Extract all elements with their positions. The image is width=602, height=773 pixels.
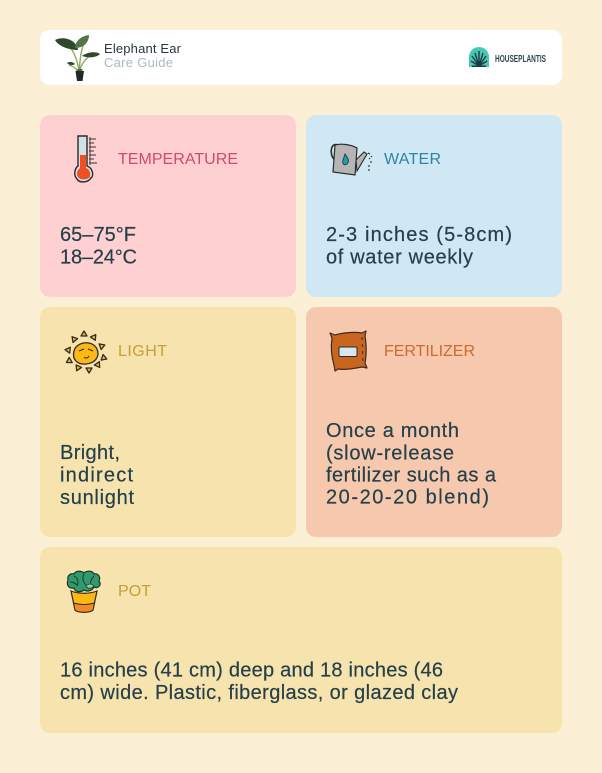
water value bbox=[326, 224, 512, 268]
label: pot: POT bbox=[118, 583, 151, 600]
temperature value: 18–24°C bbox=[60, 246, 137, 268]
icon: elephant ear plant bbox=[55, 35, 100, 81]
fertilizer value bbox=[326, 420, 497, 508]
label: fertilizer: FERTILIZER bbox=[384, 343, 475, 360]
label: water: WATER bbox=[384, 151, 441, 168]
panel: fertilizer bbox=[306, 307, 562, 537]
logo: Houseplantis bbox=[469, 47, 546, 67]
icon: sun bbox=[65, 331, 108, 373]
label: temperature: TEMPERATURE bbox=[118, 151, 238, 168]
logo: Houseplantis: HOUSEPLANTIS bbox=[495, 53, 546, 65]
water value: of water weekly bbox=[326, 246, 473, 268]
header title: Elephant Ear bbox=[104, 41, 182, 56]
light value bbox=[60, 442, 134, 509]
panel: light bbox=[40, 307, 296, 537]
water value: 2-3 inches (5-8cm) bbox=[326, 224, 512, 246]
fertilizer value: (slow-release bbox=[326, 442, 454, 464]
light value: sunlight bbox=[60, 487, 134, 509]
pot value bbox=[60, 660, 458, 704]
fertilizer value: 20-20-20 blend) bbox=[326, 486, 489, 508]
pot value: 16 inches (41 cm) deep and 18 inches (46 bbox=[60, 660, 443, 682]
icon: thermometer bbox=[75, 136, 97, 182]
fertilizer value: fertilizer such as a bbox=[326, 464, 497, 486]
header title bbox=[104, 41, 182, 70]
panel: pot bbox=[40, 547, 562, 733]
fertilizer value: Once a month bbox=[326, 420, 459, 442]
icon: fertilizer bag bbox=[330, 331, 367, 371]
header title: Care Guide bbox=[104, 55, 173, 70]
panel: temperature bbox=[40, 115, 296, 297]
icon: watering can bbox=[331, 144, 372, 175]
label: light: LIGHT bbox=[118, 343, 167, 360]
icon: potted plant bbox=[67, 571, 100, 612]
temperature value bbox=[60, 224, 137, 268]
temperature value: 65–75°F bbox=[60, 224, 136, 246]
header bar bbox=[40, 30, 562, 85]
light value: Bright, bbox=[60, 442, 120, 464]
pot value: cm) wide. Plastic, fiberglass, or glazed clay bbox=[60, 682, 458, 704]
light value: indirect bbox=[60, 464, 133, 486]
panel: water bbox=[306, 115, 562, 297]
